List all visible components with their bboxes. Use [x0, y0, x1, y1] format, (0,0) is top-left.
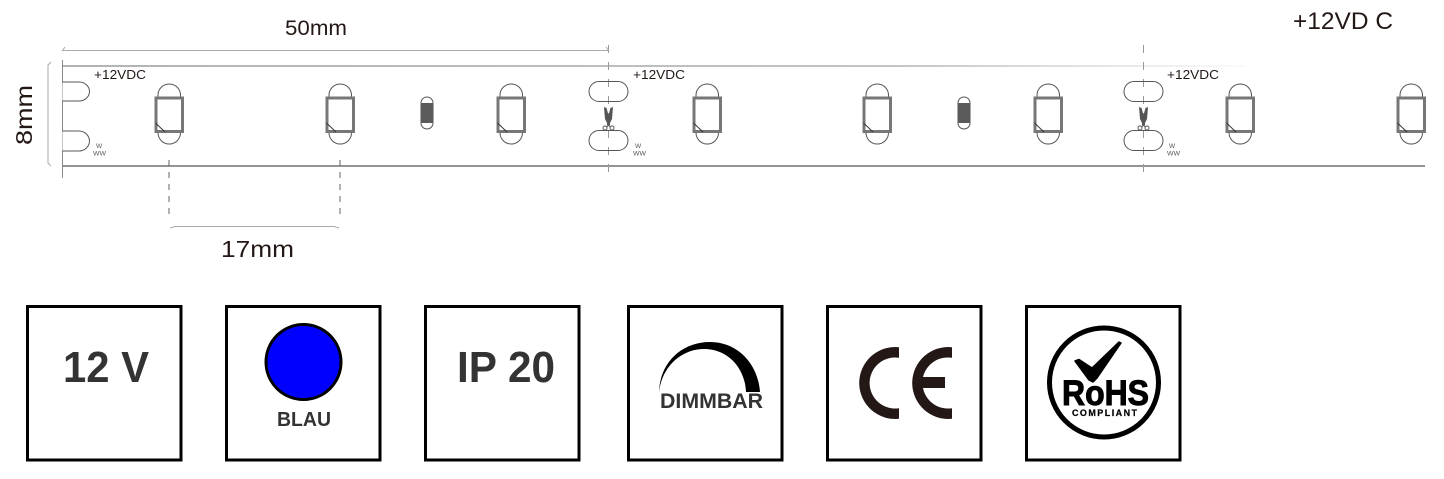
dimension: 50mm [62, 16, 608, 50]
label: W WW second: WW [633, 150, 647, 158]
label: +12VD C top right: +12VD C [1293, 8, 1393, 35]
LED chip 1 [156, 84, 182, 144]
label: W WW second [633, 143, 647, 158]
label: W WW first: WW [93, 150, 107, 158]
LED chip 7 [1226, 84, 1254, 144]
label: +12VDC second: +12VDC [633, 68, 685, 82]
resistor 2 [958, 97, 970, 129]
label: W WW third: W [1169, 143, 1176, 150]
resistor 1 [421, 97, 433, 129]
label: +12VDC third: +12VDC [1167, 68, 1219, 82]
badge: BLAU colour [226, 306, 380, 460]
label: +12VDC first: +12VDC [94, 68, 146, 82]
badge: 12 V: 12 V [63, 343, 150, 392]
cut mark 1 with pads and scissors [589, 45, 628, 180]
LED chip 5 [864, 84, 890, 144]
label: W WW third [1167, 143, 1181, 158]
label: W WW third: WW [1167, 150, 1181, 158]
badge: RoHS compliant [1026, 306, 1180, 460]
badge: IP 20: IP 20 [457, 343, 555, 392]
badge: BLAU colour: BLAU [277, 408, 331, 431]
badge: DIMMBAR: DIMMBAR [660, 390, 763, 413]
LED chip 6 [1034, 84, 1062, 144]
badge: IP 20 [426, 306, 579, 460]
dimension: 8mm: 8mm [11, 85, 37, 145]
strip outline [62, 60, 1425, 178]
dimension: 50mm: 50mm [285, 16, 347, 40]
cut mark 2 with pads and scissors [1124, 45, 1163, 180]
left solder pads [62, 82, 90, 151]
label: W WW first [93, 143, 107, 158]
LED chip 2 [326, 84, 354, 144]
badge: RoHS compliant: COMPLIANT [1072, 408, 1138, 418]
label: W WW second: W [635, 143, 642, 150]
badge: CE mark [828, 306, 981, 460]
label: W WW first: W [96, 143, 103, 150]
LED chip 8 [1398, 84, 1424, 144]
dimension: 17mm: 17mm [221, 236, 294, 262]
LED strip diagram [62, 45, 1425, 180]
LED chip 3 [498, 84, 524, 144]
dimension: 8mm [11, 62, 51, 166]
badge: DIMMBAR [628, 306, 782, 460]
badge: 12 V [28, 306, 181, 460]
LED chip 4 [694, 84, 720, 144]
badge: RoHS compliant: RoHS [1062, 374, 1149, 413]
dimension: 17mm [169, 160, 340, 262]
